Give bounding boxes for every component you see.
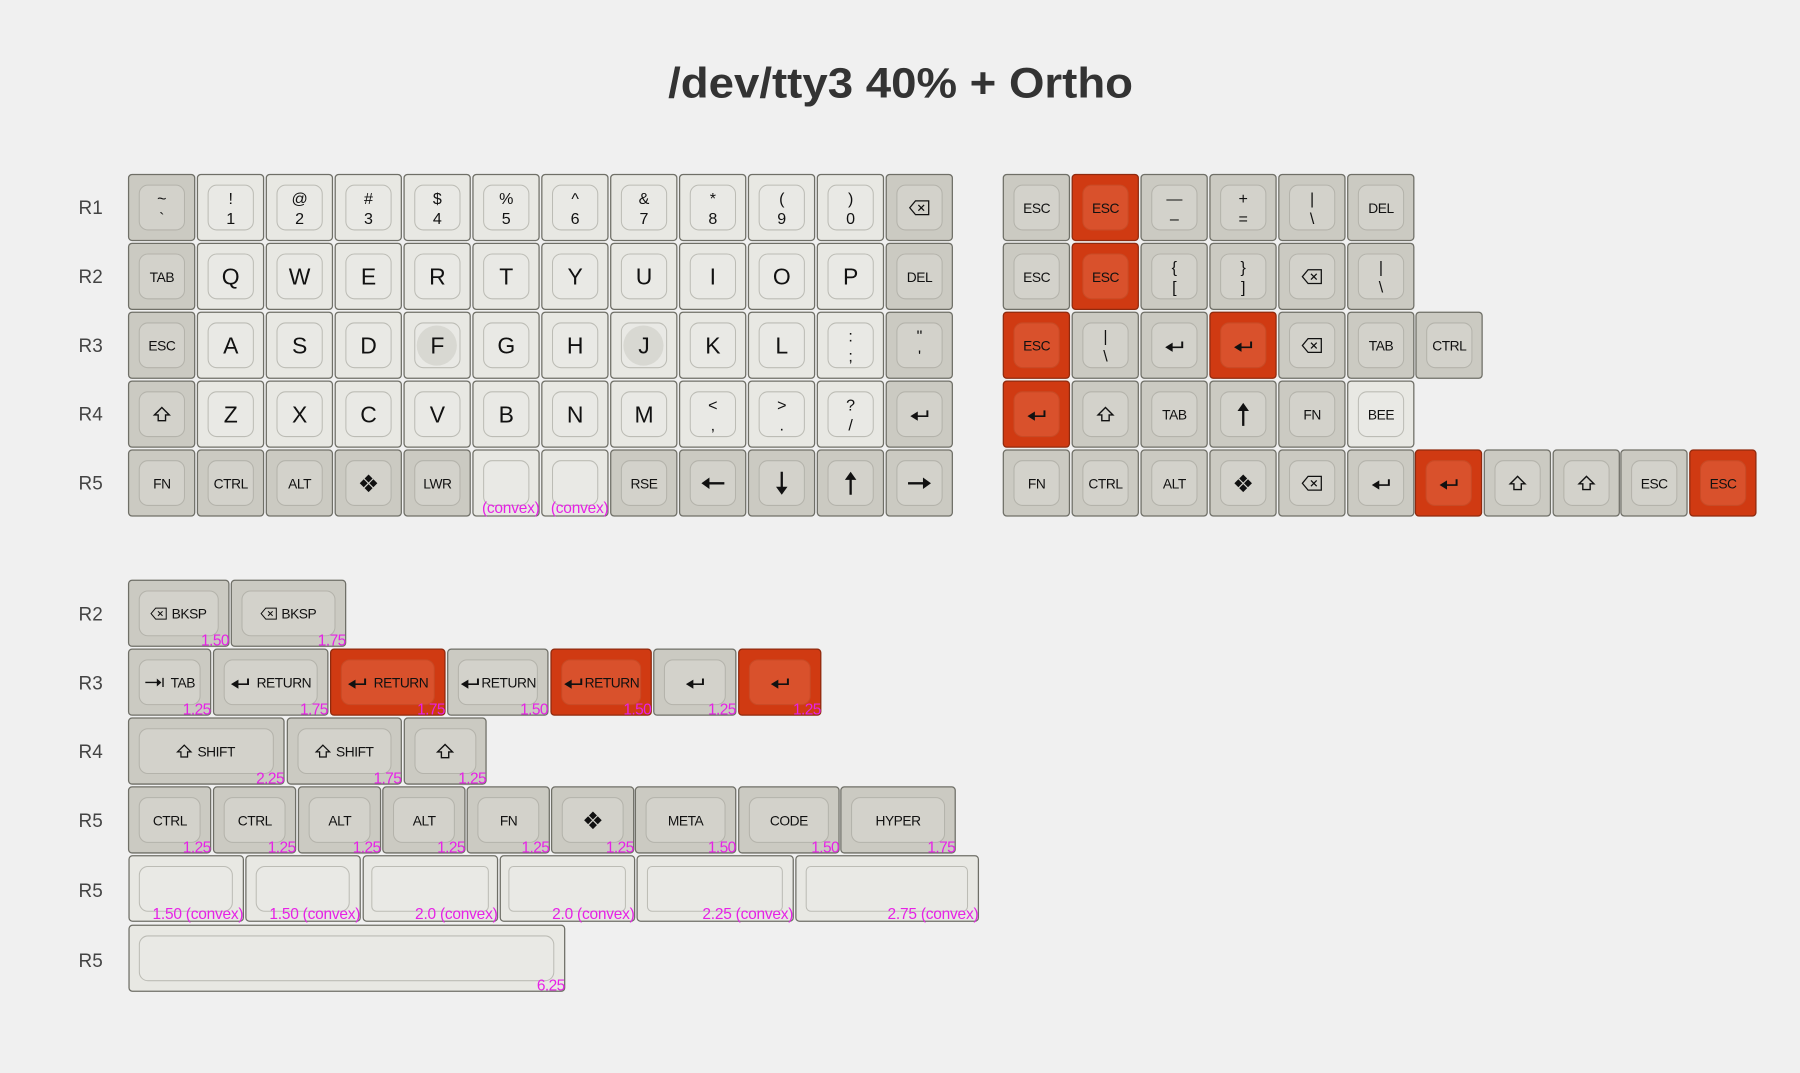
key: V: V: [430, 401, 446, 427]
key: F with homing dish: F: [430, 333, 444, 359]
key: T: T: [499, 264, 513, 290]
key: backspace: [1279, 243, 1345, 309]
key: RETURN 1.50 red: RETURN: [585, 676, 639, 691]
key: CTRL: [197, 450, 264, 516]
key: ALT 1.25: 1.25: [353, 839, 381, 856]
key: CTRL: CTRL: [214, 476, 249, 491]
key: E: [335, 243, 401, 309]
key: W: [266, 243, 332, 309]
key: backslash: |: [1310, 190, 1314, 208]
key: ALT 1.25: 1.25: [437, 839, 465, 856]
key: convex 2.25: [637, 856, 793, 923]
key: 7: [611, 174, 677, 240]
key: down arrow: [748, 450, 815, 516]
key: 4: $: [433, 190, 442, 208]
key: 5: %: [499, 190, 513, 208]
key: comma: [680, 381, 746, 447]
key: right bracket: ]: [1241, 279, 1245, 297]
key: P: P: [843, 264, 858, 290]
key: HYPER 1.75: HYPER: [875, 813, 921, 828]
key: FN: FN: [153, 476, 171, 491]
key: backspace: [1279, 312, 1345, 378]
key: Q: [197, 243, 264, 309]
key: F with homing dish: [404, 312, 470, 378]
key: right arrow: [886, 450, 952, 516]
key: up arrow: [817, 450, 883, 516]
key: ALT: ALT: [288, 476, 312, 491]
key: R: [404, 243, 470, 309]
key: CODE 1.50: CODE: [770, 813, 808, 828]
key: convex 2.75: [796, 856, 978, 923]
key: RETURN 1.50: [448, 649, 548, 719]
key: enter 1.25 red: 1.25: [793, 702, 821, 719]
key: A: A: [223, 333, 239, 359]
key: K: [680, 312, 746, 378]
key: shift: [129, 381, 195, 447]
key: RETURN 1.75: RETURN: [257, 676, 311, 691]
key: I: [680, 243, 746, 309]
key: S: S: [292, 333, 307, 359]
key: slash: /: [848, 416, 853, 434]
key: enter: [1348, 450, 1414, 516]
row labels: main and ortho layouts: R5: [79, 474, 103, 495]
row labels: alternate keys: R5: [79, 881, 103, 902]
key: E: E: [361, 264, 376, 290]
key: DEL: DEL: [907, 270, 933, 285]
key: BKSP 1.75: BKSP: [281, 607, 317, 622]
key: HYPER 1.75: 1.75: [927, 839, 955, 856]
key: super diamond 1.25: [552, 787, 634, 856]
key: K: K: [705, 333, 721, 359]
key: 2: [266, 174, 332, 240]
key: 4: 4: [433, 210, 442, 228]
key: 8: [680, 174, 746, 240]
key: RETURN 1.75 red: RETURN: [374, 676, 428, 691]
key: ESC: [1003, 243, 1069, 309]
row labels: alternate keys: R4: [79, 742, 103, 763]
key: H: [542, 312, 608, 378]
key: tilde: [129, 174, 195, 240]
key: tilde: `: [159, 210, 165, 228]
key: TAB 1.25: TAB: [171, 676, 195, 691]
key: TAB: [129, 243, 195, 309]
key: 3: #: [364, 190, 373, 208]
key: semicolon: [817, 312, 883, 378]
key: enter 1.25: [654, 649, 736, 719]
key: enter red: [1415, 450, 1482, 516]
key: enter red: [1003, 381, 1069, 447]
key: S: [266, 312, 332, 378]
key: X: X: [292, 401, 307, 427]
key: R: R: [429, 264, 446, 290]
key: backslash: \: [1379, 279, 1384, 297]
key: CTRL 1.25: CTRL: [153, 813, 188, 828]
key: enter 1.25: 1.25: [708, 702, 736, 719]
key: backslash: |: [1103, 328, 1108, 346]
key: 7: &: [639, 190, 650, 208]
key: ESC: ESC: [1023, 270, 1051, 285]
key: convex 2.0: 2.0 (convex): [415, 906, 498, 923]
key: enter: [1141, 312, 1207, 378]
key: U: U: [636, 264, 652, 290]
key: enter red: [1210, 312, 1276, 378]
key: backslash: [1348, 243, 1414, 309]
key: equals: [1210, 174, 1276, 240]
key: 3: 3: [364, 210, 373, 228]
key: right bracket: }: [1241, 259, 1247, 277]
key: convex 1.50: 1.50 (convex): [153, 906, 243, 923]
key: slash: [817, 381, 883, 447]
key: super diamond: [335, 450, 401, 516]
key: 1: [197, 174, 264, 240]
key: U: [611, 243, 677, 309]
key: META 1.50: [635, 787, 736, 856]
key: backspace: [886, 174, 952, 240]
key: L: L: [775, 333, 788, 359]
key: LWR: [404, 450, 470, 516]
key: RSE: [611, 450, 677, 516]
key: ESC: ESC: [1641, 476, 1668, 491]
key: CTRL 1.25: [129, 787, 211, 856]
key: X: [266, 381, 332, 447]
key: 9: (: [779, 190, 785, 208]
key: FN 1.25: 1.25: [521, 839, 549, 856]
key: enter: [886, 381, 952, 447]
key: semicolon: ;: [848, 348, 853, 366]
key: 0: 0: [846, 210, 855, 228]
key: CTRL: CTRL: [1088, 476, 1123, 491]
title: /dev/tty3 40% + Ortho: [668, 60, 1133, 107]
key: TAB 1.25: [129, 649, 211, 719]
key: META 1.50: META: [668, 813, 705, 828]
key: BKSP 1.50: [129, 580, 229, 650]
key: SHIFT 2.25: 2.25: [256, 770, 284, 787]
key: convex 1.50: [246, 856, 360, 923]
key: CTRL: [1072, 450, 1138, 516]
key: CTRL: [1416, 312, 1482, 378]
key: FN 1.25: FN: [500, 813, 517, 828]
key: RSE: RSE: [631, 476, 658, 491]
key: LWR: LWR: [423, 476, 452, 491]
key: ESC red: [1003, 312, 1069, 378]
key: 5: [473, 174, 539, 240]
key: ALT 1.25: ALT: [328, 813, 352, 828]
key: convex 2.25: 2.25 (convex): [702, 906, 793, 923]
key: RETURN 1.50: RETURN: [481, 676, 536, 691]
key: BKSP 1.75: 1.75: [318, 633, 346, 650]
key: CODE 1.50: [739, 787, 839, 856]
key: ALT: [1141, 450, 1207, 516]
key: ESC red: ESC: [1092, 201, 1119, 216]
panel: ortho layout: [1003, 174, 1756, 516]
key: SHIFT 2.25: [129, 718, 284, 787]
key: TAB 1.25: 1.25: [183, 702, 211, 719]
key: CTRL 1.25: 1.25: [183, 839, 211, 856]
key: Q: Q: [222, 264, 240, 290]
key: ESC: [1003, 174, 1069, 240]
key: backslash: \: [1310, 210, 1315, 228]
key: convex right: [542, 450, 608, 517]
key: shift 1.25: [404, 718, 486, 787]
key: spacebar 6.25: 6.25: [537, 978, 565, 995]
key: TAB: [1348, 312, 1414, 378]
row labels: alternate keys: R3: [79, 673, 103, 694]
key: tilde: ~: [157, 190, 167, 208]
key: G: G: [497, 333, 515, 359]
key: backslash: [1072, 312, 1138, 378]
key: D: [335, 312, 401, 378]
key: ESC red: ESC: [1023, 339, 1051, 354]
key: RETURN 1.75 red: [331, 649, 445, 719]
key: SHIFT 1.75: 1.75: [373, 770, 401, 787]
key: ESC red: ESC: [1710, 476, 1737, 491]
key: ESC: [129, 312, 195, 378]
key: SHIFT 1.75: SHIFT: [336, 745, 375, 760]
key: convex 2.0: [363, 856, 498, 923]
row labels: main and ortho layouts: R3: [79, 336, 103, 357]
key: CTRL: CTRL: [1432, 339, 1467, 354]
key: DEL: [886, 243, 952, 309]
key: convex 2.75: 2.75 (convex): [888, 906, 978, 923]
key: C: [335, 381, 401, 447]
key: period: >: [777, 396, 786, 414]
key: quote: ": [917, 328, 923, 346]
key: equals: +: [1239, 190, 1248, 208]
key: 7: 7: [640, 210, 649, 228]
key: shift: [1553, 450, 1619, 516]
key: J with homing dish: [611, 312, 677, 378]
key: I: I: [710, 264, 716, 290]
key: RETURN 1.50 red: [551, 649, 651, 719]
key: 3: [335, 174, 401, 240]
key: O: O: [773, 264, 791, 290]
row labels: main and ortho layouts: R1: [79, 198, 103, 219]
key: RETURN 1.75 red: 1.75: [417, 702, 445, 719]
key: 6: 6: [571, 210, 580, 228]
key: left bracket: [1141, 243, 1207, 309]
key: convex 2.0: [500, 856, 635, 923]
key: convex 2.0: 2.0 (convex): [552, 906, 635, 923]
key: TAB: TAB: [1369, 339, 1393, 354]
key: 9: 9: [777, 210, 786, 228]
key: minus: —: [1166, 190, 1183, 208]
key: quote: [886, 312, 952, 378]
key: ESC red: [1072, 243, 1138, 309]
key: B: [473, 381, 539, 447]
key: ALT 1.25: ALT: [413, 813, 437, 828]
key: RETURN 1.50: 1.50: [520, 702, 548, 719]
key: P: [817, 243, 883, 309]
key: C: C: [360, 401, 377, 427]
key: 9: [748, 174, 815, 240]
key: META 1.50: 1.50: [708, 839, 736, 856]
key: ALT 1.25: [298, 787, 381, 856]
key: convex left: (convex): [482, 500, 540, 517]
key: 0: ): [848, 190, 853, 208]
key: ESC red: ESC: [1092, 270, 1119, 285]
key: BEE: [1348, 381, 1414, 447]
key: period: .: [780, 416, 784, 434]
key: super diamond: ❖: [1232, 470, 1254, 498]
key: super diamond: ❖: [358, 470, 379, 498]
key: left bracket: [: [1172, 279, 1177, 297]
key: ESC red: [1690, 450, 1756, 516]
key: FN: [1003, 450, 1069, 516]
key: comma: ,: [711, 416, 715, 434]
key: 2: @: [291, 190, 308, 208]
key: 0: [817, 174, 883, 240]
key: convex left: [473, 450, 540, 517]
key: 1: !: [229, 190, 233, 208]
key: D: D: [360, 333, 377, 359]
key: CTRL 1.25: [214, 787, 296, 856]
key: TAB: TAB: [1162, 408, 1187, 423]
key: BKSP 1.75: [231, 580, 346, 650]
key: BEE: BEE: [1368, 408, 1394, 423]
row labels: main and ortho layouts: R4: [79, 405, 103, 426]
key: RETURN 1.75: [214, 649, 328, 719]
row labels: alternate keys: R5: [79, 811, 103, 832]
key: J with homing dish: J: [638, 333, 650, 359]
key: Y: [542, 243, 608, 309]
key: up arrow: [1210, 381, 1276, 447]
key: O: [748, 243, 815, 309]
key: SHIFT 1.75: [287, 718, 401, 787]
key: quote: ': [918, 348, 921, 366]
key: comma: <: [708, 396, 718, 414]
key: 8: 8: [708, 210, 717, 228]
key: Y: Y: [567, 264, 583, 290]
key: ESC: [1621, 450, 1687, 516]
key: left bracket: {: [1172, 259, 1178, 277]
key: ESC red: [1072, 174, 1138, 240]
key: B: B: [499, 401, 514, 427]
key: minus: [1141, 174, 1207, 240]
key: TAB: TAB: [150, 270, 174, 285]
key: backslash: \: [1103, 348, 1108, 366]
key: M: [611, 381, 677, 447]
key: ALT: [266, 450, 332, 516]
key: shift: [1072, 381, 1138, 447]
key: backslash: [1279, 174, 1345, 240]
key: 4: [404, 174, 470, 240]
key: BKSP 1.50: BKSP: [172, 607, 207, 622]
key: ALT: ALT: [1163, 476, 1187, 491]
key: backspace: [1279, 450, 1345, 516]
key: equals: =: [1239, 210, 1248, 228]
key: 8: *: [710, 190, 716, 208]
key: convex 1.50: [129, 856, 243, 923]
key: super diamond: [1210, 450, 1276, 516]
key: super diamond 1.25: ❖: [582, 807, 604, 835]
panel: alternate sizes: [129, 580, 978, 995]
key: 5: 5: [502, 210, 511, 228]
key: DEL: DEL: [1368, 201, 1394, 216]
key: 1: 1: [226, 210, 235, 228]
row labels: main and ortho layouts: [79, 198, 103, 495]
key: spacebar 6.25: [129, 925, 565, 995]
key: CTRL 1.25: 1.25: [268, 839, 296, 856]
key: A: [197, 312, 264, 378]
key: shift 1.25: 1.25: [458, 770, 486, 787]
key: RETURN 1.75: 1.75: [300, 702, 328, 719]
key: RETURN 1.50 red: 1.50: [623, 702, 651, 719]
key: semicolon: :: [848, 328, 853, 346]
key: N: [542, 381, 608, 447]
panel: 40% main layout: [129, 174, 952, 517]
key: left arrow: [680, 450, 746, 516]
key: L: [748, 312, 815, 378]
key: TAB: [1141, 381, 1207, 447]
key: Z: [197, 381, 264, 447]
row labels: alternate keys: R5: [79, 951, 103, 972]
key: HYPER 1.75: [841, 787, 955, 856]
key: M: M: [634, 401, 654, 427]
key: DEL: [1348, 174, 1414, 240]
key: FN: FN: [1303, 408, 1321, 423]
key: backslash: |: [1379, 259, 1383, 277]
key: T: [473, 243, 539, 309]
key: H: H: [567, 333, 583, 359]
key: ESC: ESC: [148, 339, 176, 354]
key: convex right: (convex): [551, 500, 608, 517]
key: period: [748, 381, 815, 447]
key: FN: [129, 450, 195, 516]
key: ESC: ESC: [1023, 201, 1051, 216]
key: FN: [1279, 381, 1345, 447]
key: 6: [542, 174, 608, 240]
key: convex 1.50: 1.50 (convex): [269, 906, 360, 923]
key: shift: [1484, 450, 1550, 516]
key: W: W: [289, 264, 311, 290]
key: FN 1.25: [467, 787, 549, 856]
key: G: [473, 312, 539, 378]
key: minus: –: [1170, 210, 1179, 228]
key: SHIFT 2.25: SHIFT: [197, 745, 236, 760]
key: super diamond 1.25: 1.25: [606, 839, 634, 856]
key: 2: 2: [295, 210, 304, 228]
key: CTRL 1.25: CTRL: [238, 813, 273, 828]
key: enter 1.25 red: [739, 649, 821, 719]
row labels: alternate keys: R2: [79, 604, 103, 625]
key: FN: FN: [1028, 476, 1045, 491]
row labels: alternate keys: [79, 604, 103, 972]
key: CODE 1.50: 1.50: [811, 839, 839, 856]
key: 6: ^: [571, 190, 579, 208]
key: right bracket: [1210, 243, 1276, 309]
key: slash: ?: [846, 396, 855, 414]
key: ALT 1.25: [383, 787, 465, 856]
key: Z: Z: [224, 401, 238, 427]
key: BKSP 1.50: 1.50: [201, 633, 229, 650]
key: V: [404, 381, 470, 447]
row labels: main and ortho layouts: R2: [79, 267, 103, 288]
key: N: N: [567, 401, 583, 427]
